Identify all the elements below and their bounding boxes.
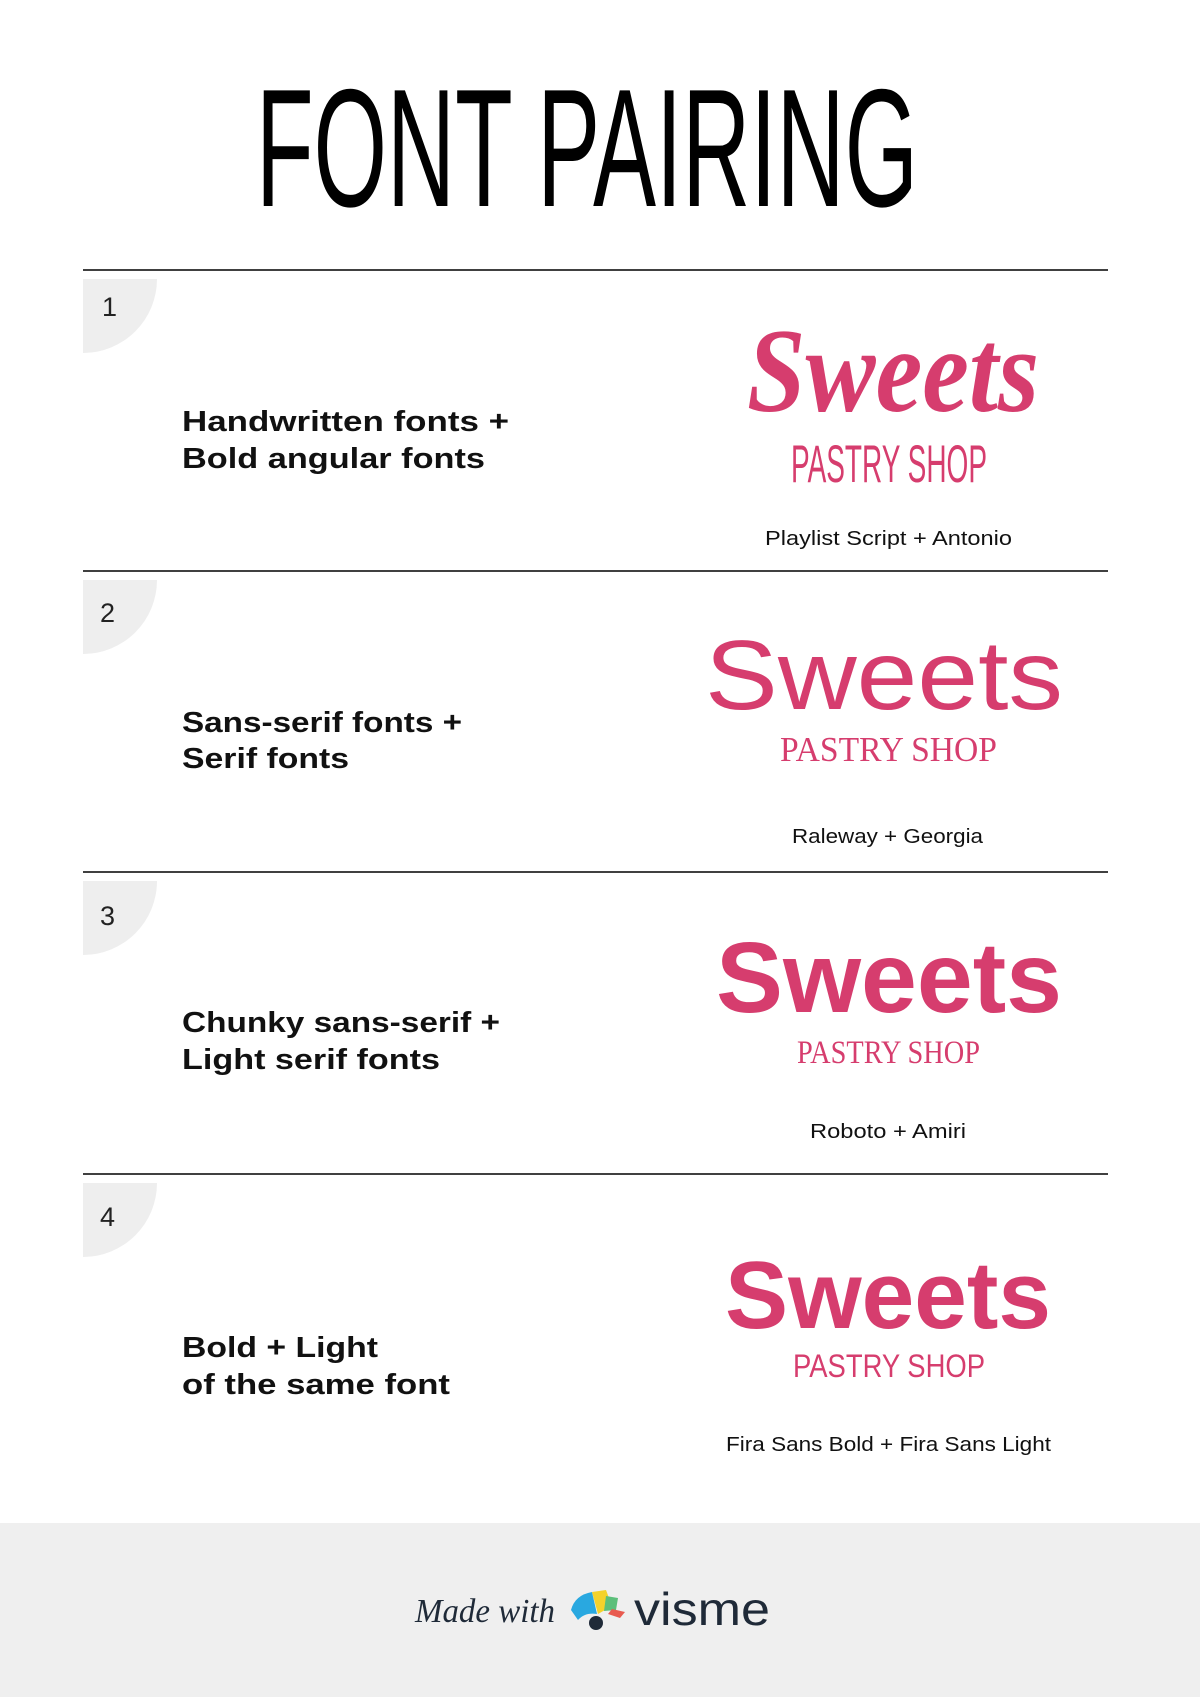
number badge 3	[83, 881, 157, 955]
icon: visme logo	[571, 1590, 625, 1630]
panel: row 2	[83, 580, 1063, 848]
sample 2	[705, 620, 1063, 769]
label 2: Serif fonts	[182, 743, 349, 775]
sample 4: Sweets	[725, 1242, 1051, 1349]
made with text: Made with	[414, 1593, 555, 1630]
sample 2: Sweets	[705, 620, 1063, 730]
number badge 1	[83, 279, 157, 353]
visme wordmark: visme	[634, 1583, 770, 1635]
panel: row 4	[83, 1183, 1051, 1456]
number badge 4: 4	[100, 1202, 115, 1232]
panel: row 1	[83, 279, 1039, 550]
sample 4: PASTRY SHOP	[793, 1348, 985, 1384]
number badge 2	[83, 580, 157, 654]
caption 3: Roboto + Amiri	[810, 1121, 966, 1143]
sample 3: PASTRY SHOP	[797, 1035, 980, 1071]
caption 1: Playlist Script + Antonio	[765, 528, 1012, 550]
label 4: Bold + Light	[182, 1332, 378, 1364]
label 1: Bold angular fonts	[182, 443, 485, 475]
number badge 3: 3	[100, 901, 115, 931]
label 1: Handwritten fonts +	[182, 406, 509, 438]
number badge 2: 2	[100, 598, 115, 628]
label 3: Light serif fonts	[182, 1044, 440, 1076]
sample 2: PASTRY SHOP	[780, 730, 997, 769]
label 3: Chunky sans-serif +	[182, 1007, 500, 1039]
number badge 1: 1	[102, 292, 117, 322]
label 4: of the same font	[182, 1369, 450, 1401]
panel: row 3	[83, 881, 1062, 1143]
sample 1: PASTRY SHOP	[791, 435, 987, 494]
number badge 4	[83, 1183, 157, 1257]
caption 2: Raleway + Georgia	[792, 826, 984, 848]
sample 1: Sweets	[747, 304, 1039, 437]
sample 3: Sweets	[716, 922, 1062, 1034]
footer	[0, 1523, 1200, 1697]
label 2: Sans-serif fonts +	[182, 707, 462, 739]
sample 1	[747, 304, 1039, 494]
caption 4: Fira Sans Bold + Fira Sans Light	[726, 1434, 1051, 1456]
